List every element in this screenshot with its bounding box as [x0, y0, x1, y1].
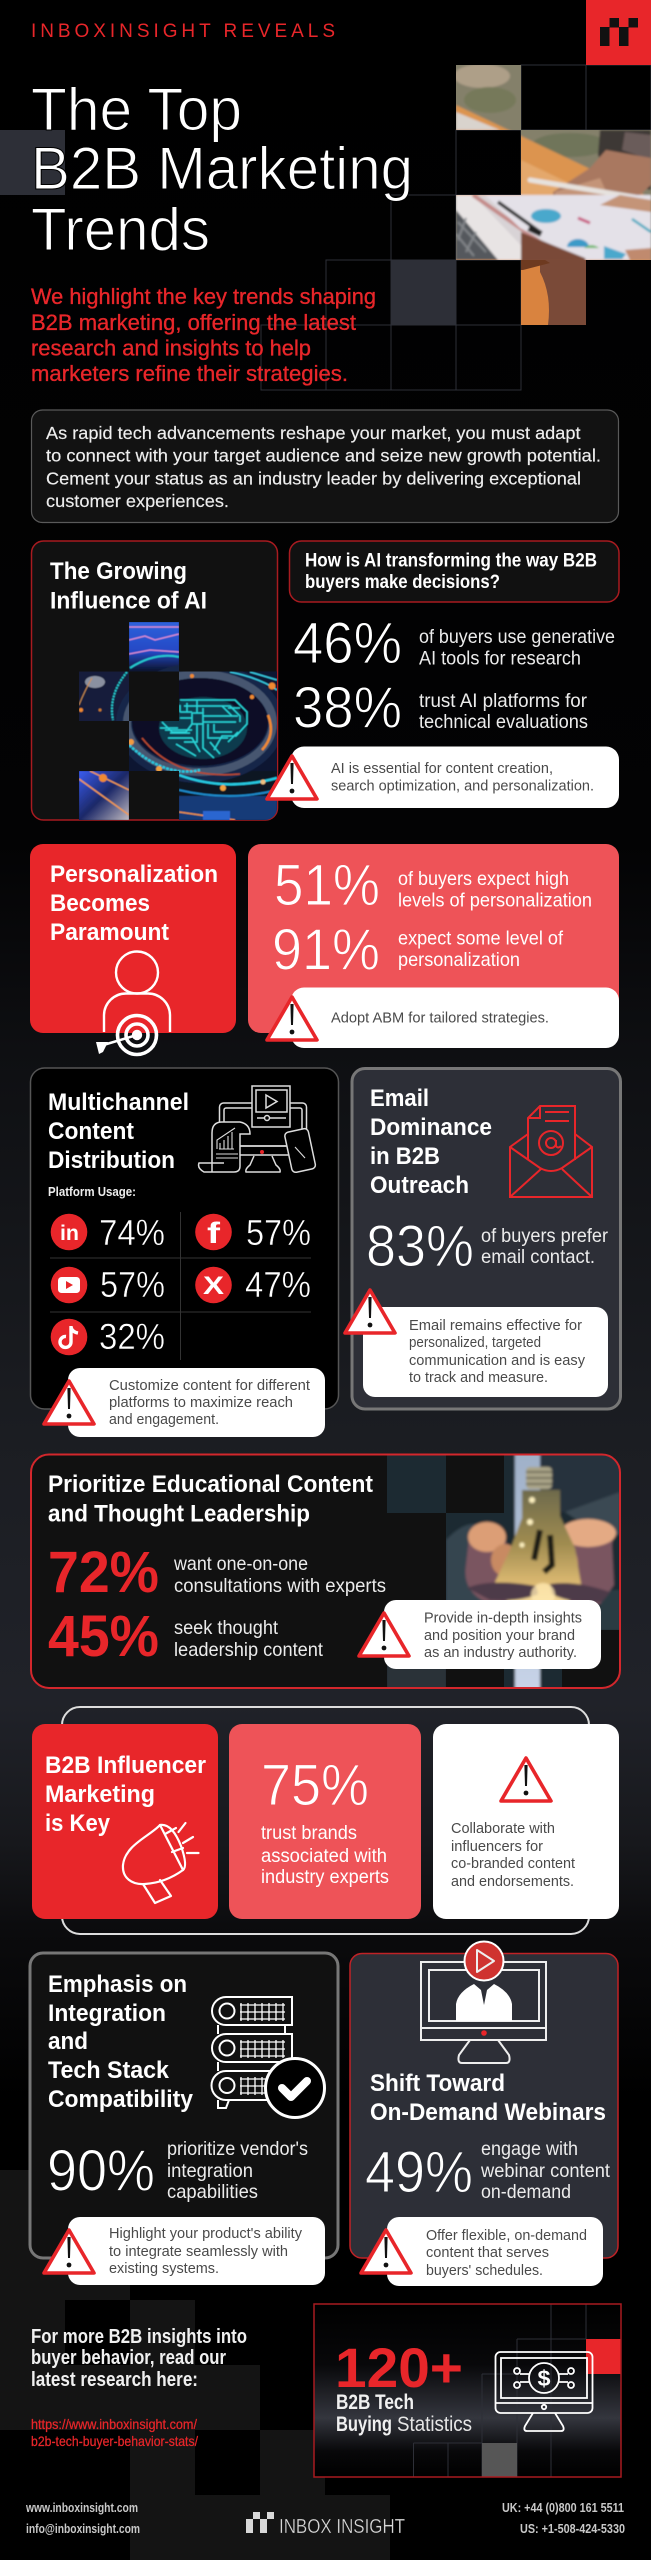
stat: Facebook: 57%	[246, 1212, 311, 1253]
panel: AI question: buyers make decisions?	[305, 572, 500, 593]
stat: 45%: seek thought	[174, 1617, 279, 1639]
footer: contact left	[25, 2501, 140, 2536]
text block: more insights: buyer behavior, read our	[31, 2347, 226, 2369]
panel: personalization stats: levels of personalization	[398, 890, 592, 912]
heading: Influence of AI	[50, 588, 207, 614]
panel: AI question	[290, 541, 619, 602]
panel: multichannel: Multichannel	[48, 1089, 189, 1116]
callout: customize content	[44, 1368, 325, 1437]
footer: contact left: info@inboxinsight.com	[26, 2522, 140, 2536]
stat: 38%: technical evaluations	[419, 711, 588, 733]
callout: webinars: Offer flexible, on-demand	[426, 2227, 587, 2244]
text block: more insights: For more B2B insights into	[31, 2326, 247, 2348]
stat: 72%	[48, 1540, 386, 1605]
callout: customize content: Customize content for different	[109, 1377, 311, 1394]
callout: integration: to integrate seamlessly with	[109, 2243, 288, 2260]
stat: LinkedIn	[51, 1212, 165, 1253]
stat: TikTok: 32%	[99, 1316, 165, 1357]
link: https://www.inboxinsight.com/	[31, 2416, 197, 2432]
icon: envelope	[510, 1106, 592, 1197]
callout: webinars: buyers' schedules.	[426, 2262, 543, 2279]
icon: warning	[44, 2230, 94, 2273]
title	[31, 76, 413, 263]
callout: email: personalized, targeted	[409, 1334, 541, 1351]
stat: X	[195, 1264, 311, 1305]
icon: warning	[359, 1613, 409, 1656]
icon: warning	[267, 997, 317, 1040]
stat: YouTube	[51, 1264, 165, 1305]
panel: influencer marketing: is Key	[45, 1810, 110, 1837]
panel: integration	[30, 1953, 338, 2258]
panel: webinars: Shift Toward	[370, 2070, 505, 2097]
callout: email: communication and is easy	[409, 1352, 585, 1369]
icon: warning	[267, 756, 317, 799]
title: B2B Marketing	[31, 135, 413, 202]
callout: email: Email remains effective for	[409, 1317, 582, 1334]
eyebrow: INBOXINSIGHT REVEALS	[31, 21, 335, 42]
callout: webinars	[361, 2217, 603, 2286]
text block: more insights: latest research here:	[31, 2369, 198, 2391]
panel: 120+ statistics: Buying	[336, 2413, 392, 2436]
icon: server with check	[212, 1997, 324, 2118]
callout: integration	[44, 2217, 325, 2285]
stat: 45%: 45%	[48, 1604, 159, 1669]
panel: intro	[32, 410, 618, 522]
panel: 75%: trust brands	[261, 1822, 357, 1844]
stat: 46%: AI tools for research	[419, 648, 581, 670]
panel: collaborate	[433, 1724, 619, 1919]
panel: integration: Compatibility	[48, 2086, 193, 2113]
panel: influencer frame	[62, 1707, 589, 1934]
panel: collaborate: and endorsements.	[451, 1873, 574, 1890]
link	[31, 2416, 198, 2449]
panel: email dominance: Outreach	[370, 1172, 469, 1199]
footer: contact right: UK: +44 (0)800 161 5511	[502, 2501, 624, 2515]
panel: collaborate: influencers for	[451, 1838, 543, 1855]
icon: webinar monitor	[421, 1942, 546, 2063]
panel: personalization stats: 91%	[272, 918, 380, 982]
panel: personalization	[30, 844, 236, 1033]
panel: intro: to connect with your target audience and seize new growth potential.	[46, 446, 601, 466]
link: b2b-tech-buyer-behavior-stats/	[31, 2433, 198, 2449]
panel: email dominance: Email	[370, 1085, 429, 1112]
heading	[50, 558, 207, 614]
panel: 120+ statistics: Statistics	[397, 2413, 472, 2436]
panel: influencer marketing: Marketing	[45, 1781, 155, 1808]
panel: 75%: 75%	[261, 1753, 369, 1818]
stat: 72%: consultations with experts	[174, 1575, 386, 1597]
stat: 72%: want one-on-one	[173, 1553, 308, 1575]
hero grid decoration	[0, 65, 651, 390]
logo badge	[586, 0, 651, 65]
panel: webinars: 49%	[365, 2140, 473, 2205]
panel: integration: prioritize vendor's	[167, 2138, 308, 2160]
panel: integration: Integration	[48, 2000, 166, 2027]
subtitle: marketers refine their strategies.	[31, 361, 348, 386]
panel: 120+ statistics: B2B Tech	[336, 2391, 414, 2414]
panel: intro: As rapid tech advancements reshape your market, you must adapt	[46, 423, 581, 443]
panel: email dominance: email contact.	[481, 1246, 595, 1268]
callout: in-depth insights: Provide in-depth insights	[424, 1610, 582, 1626]
panel: collaborate: Collaborate with	[451, 1820, 555, 1837]
panel: email dominance: of buyers prefer	[481, 1225, 608, 1247]
panel: influencer marketing: B2B Influencer	[45, 1752, 206, 1779]
icon: megaphone	[123, 1823, 198, 1903]
panel: 75%: associated with	[261, 1845, 387, 1867]
panel: webinars	[350, 1942, 618, 2258]
panel: personalization: Becomes	[50, 890, 150, 917]
callout: ABM	[267, 988, 619, 1048]
callout: in-depth insights: as an industry authority.	[424, 1644, 577, 1661]
panel: personalization stats: of buyers expect high	[398, 868, 569, 890]
hero photo: hands pointing at charts	[450, 60, 651, 330]
panel: AI question: How is AI transforming the way B2B	[305, 550, 597, 572]
panel: integration: Emphasis on	[48, 1971, 187, 1998]
stat: TikTok	[51, 1316, 165, 1357]
heading: The Growing	[50, 558, 187, 585]
panel: 75%	[229, 1724, 421, 1919]
callout: integration: existing systems.	[109, 2260, 219, 2277]
panel: webinars: webinar content	[480, 2160, 611, 2182]
footer: logo	[246, 2512, 405, 2538]
callout: customize content: platforms to maximize reach	[109, 1394, 293, 1411]
callout: in-depth insights: and position your brand	[424, 1627, 575, 1644]
stat: 45%: leadership content	[174, 1639, 324, 1661]
panel: growing influence of AI	[32, 541, 284, 823]
stat: 38%: 38%	[293, 676, 402, 740]
title: The Top	[31, 76, 242, 143]
stat: 46%	[293, 611, 615, 676]
callout: integration: Highlight your product's ability	[109, 2225, 302, 2242]
stat: 72%: 72%	[48, 1540, 159, 1605]
panel: multichannel	[30, 1068, 338, 1409]
panel: webinars: engage with	[481, 2138, 578, 2160]
panel: integration: 90%	[47, 2138, 155, 2204]
panel: multichannel: Distribution	[48, 1147, 175, 1174]
panel: integration: integration	[167, 2160, 253, 2182]
stat: X: 47%	[245, 1264, 311, 1305]
callout: customize content: and engagement.	[109, 1411, 219, 1428]
title: Trends	[31, 196, 210, 263]
panel: integration: capabilities	[167, 2181, 258, 2203]
panel: email dominance: 83%	[366, 1214, 474, 1279]
callout: in-depth insights	[359, 1600, 601, 1669]
callout: email	[345, 1290, 608, 1397]
image: light bulb in hands	[385, 1452, 625, 1692]
icon: monitor with dollar	[496, 2352, 592, 2431]
panel: collaborate: co-branded content	[451, 1855, 576, 1872]
stat: 38%	[293, 676, 588, 740]
panel: personalization: Paramount	[50, 919, 169, 946]
footer: contact right	[502, 2501, 625, 2536]
stat: Facebook: f	[207, 1217, 221, 1250]
panel: personalization stats: 51%	[274, 853, 380, 918]
panel: email dominance: Dominance	[370, 1114, 492, 1141]
stat: 38%: trust AI platforms for	[419, 690, 587, 712]
callout: email: to track and measure.	[409, 1369, 548, 1386]
panel: personalization: Personalization	[50, 861, 218, 888]
panel: multichannel: Content	[48, 1118, 134, 1145]
callout: AI	[267, 746, 619, 808]
stat: 46%: of buyers use generative	[419, 626, 615, 648]
panel: personalization stats: personalization	[398, 949, 520, 971]
callout: webinars: content that serves	[426, 2244, 549, 2261]
icon: monitor with dollar: $	[538, 2366, 550, 2391]
panel: webinars: on-demand	[481, 2181, 571, 2203]
panel: personalization stats	[248, 844, 619, 1033]
icon: warning	[44, 1381, 94, 1424]
subtitle: B2B marketing, offering the latest	[31, 310, 356, 335]
stat: LinkedIn: 74%	[99, 1212, 165, 1253]
panel: 120+ statistics: 120+	[335, 2336, 463, 2399]
panel: 120+ statistics	[314, 2304, 621, 2477]
footer: contact right: US: +1-508-424-5330	[520, 2522, 625, 2536]
icon: warning	[361, 2230, 411, 2273]
stat: LinkedIn: in	[60, 1222, 79, 1245]
callout: AI: AI is essential for content creation,	[331, 760, 553, 777]
callout: ABM: Adopt ABM for tailored strategies.	[331, 1010, 549, 1026]
panel: integration: Tech Stack	[48, 2057, 169, 2084]
panel: educational content: Prioritize Educational Content	[48, 1471, 373, 1498]
image: AI circuit brain	[75, 618, 284, 823]
stat: YouTube: 57%	[100, 1264, 165, 1305]
panel: 75%: industry experts	[261, 1866, 389, 1888]
stat: Facebook	[195, 1212, 311, 1253]
footer: contact left: www.inboxinsight.com	[25, 2501, 138, 2515]
subtitle	[31, 284, 376, 386]
subtitle: research and insights to help	[31, 336, 311, 360]
panel: intro: customer experiences.	[46, 491, 229, 511]
stat: 46%: 46%	[293, 611, 402, 676]
icon: warning	[501, 1758, 551, 1801]
panel: educational content: and Thought Leadership	[48, 1500, 310, 1528]
panel: influencer marketing	[32, 1724, 218, 1919]
panel: integration: and	[48, 2028, 88, 2055]
panel: email dominance	[352, 1068, 620, 1409]
icon: person with target	[96, 952, 170, 1054]
stat: 45%	[48, 1604, 324, 1669]
footer: logo: INBOX INSIGHT	[279, 2516, 405, 2538]
panel: educational content	[31, 1452, 625, 1692]
panel: personalization stats: expect some level of	[398, 928, 564, 950]
callout: AI: search optimization, and personalization.	[331, 778, 594, 794]
panel: email dominance: in B2B	[370, 1143, 440, 1170]
panel: intro: Cement your status as an industry leader by delivering exceptional	[46, 468, 581, 488]
icon: warning	[345, 1290, 395, 1333]
stat: X: X	[203, 1272, 224, 1300]
subtitle: We highlight the key trends shaping	[31, 284, 376, 309]
text block: more insights	[31, 2326, 247, 2391]
label: platform usage: Platform Usage:	[48, 1184, 136, 1199]
icon: devices	[199, 1086, 316, 1173]
panel: webinars: On-Demand Webinars	[370, 2099, 606, 2126]
